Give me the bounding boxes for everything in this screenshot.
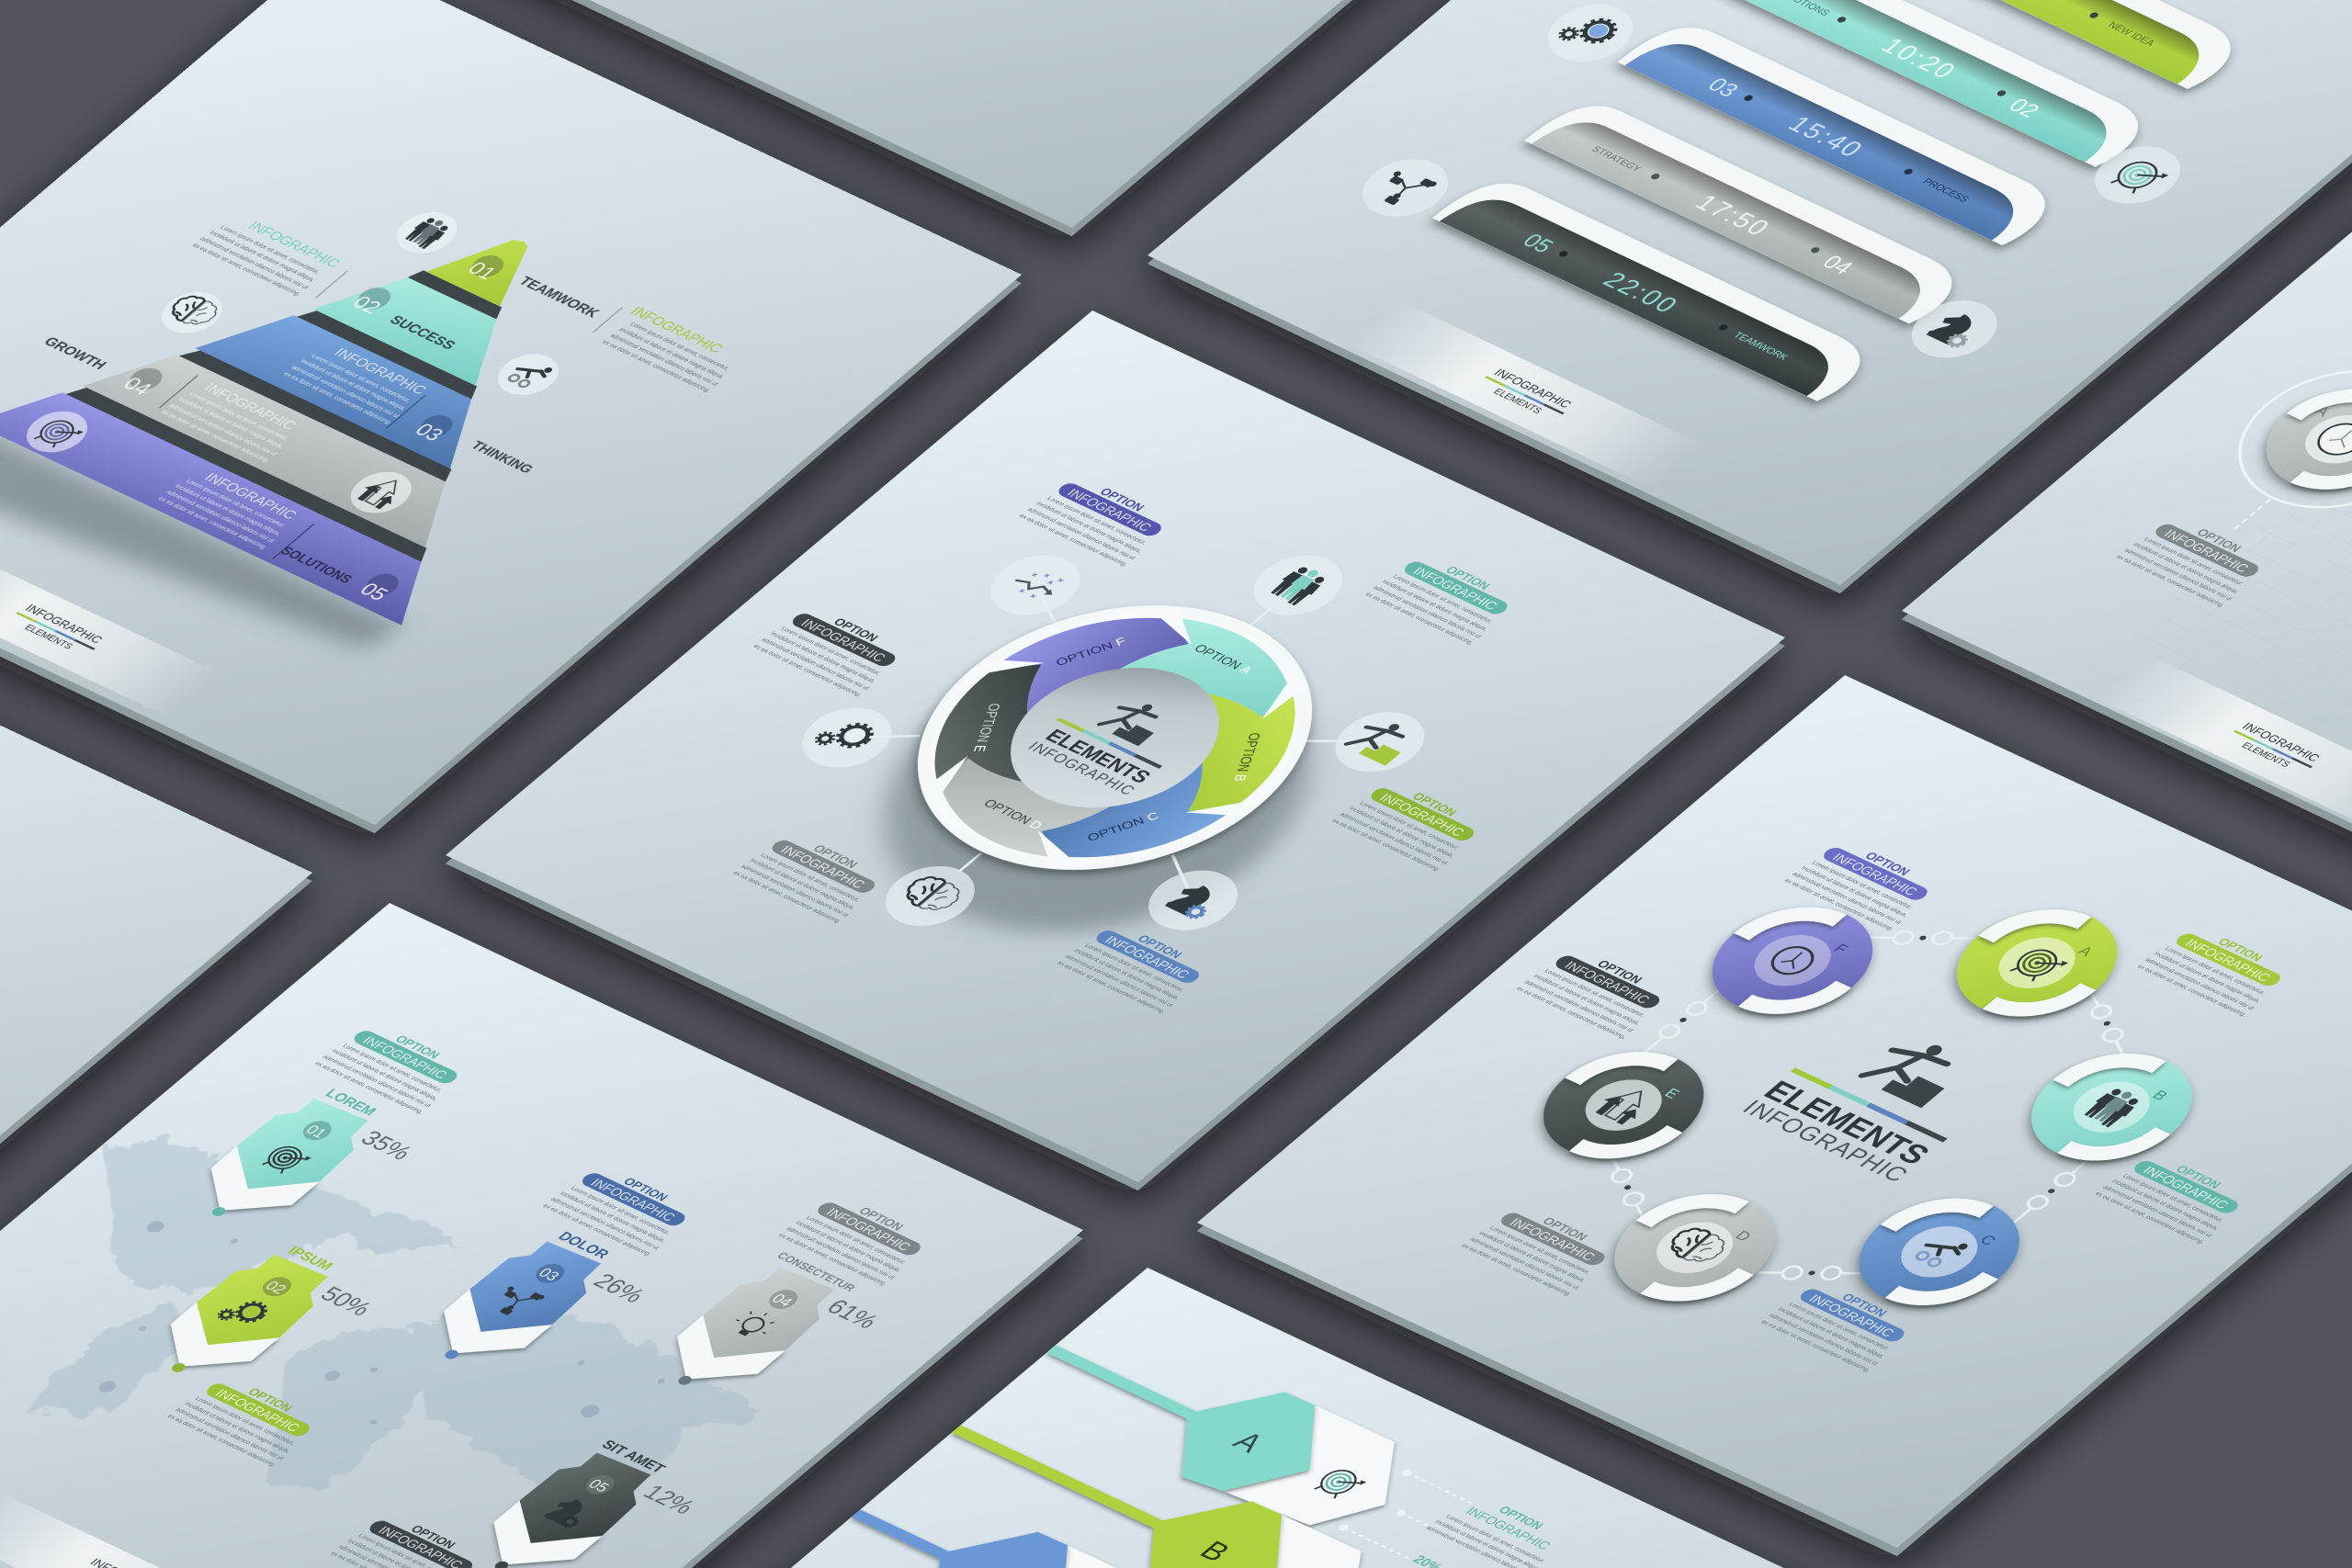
callout: option A: OPTION <box>1442 564 1493 592</box>
pyramid chart: incididunt ut labore et dolore magna aliqua, <box>174 483 282 536</box>
disc B: B <box>2149 1088 2172 1103</box>
callout: option D: OPTION <box>810 842 861 871</box>
callout: option F: Lorem ipsum dolor sit amet, consectetur, <box>1810 861 1914 910</box>
text block: green infographic: INFOGRAPHIC <box>627 305 726 356</box>
timeline bar: dark: 05 <box>1517 231 1558 257</box>
callout: green: incididunt ut labore et dolore magna aliqua, <box>183 1401 291 1454</box>
pyramid chart: ex ea dolor sit amet, consectetur adipisicing. <box>156 496 268 550</box>
centre title: ELEMENTS <box>1756 1076 1937 1170</box>
wheel centre title <box>1022 682 1205 798</box>
pyramid chart: incididunt ut labore et dolore magna aliqua, <box>176 397 285 450</box>
callout: option B: incididunt ut labore et dolore magna aliqua, <box>2110 1179 2220 1232</box>
callout: option C: Lorem ipsum dolor sit amet, consectetur, <box>1083 942 1185 993</box>
text block: option infographic <box>1393 1488 1579 1568</box>
callout: blue: adminstrud xercitation ullamco laboris nisi ut <box>549 1197 661 1251</box>
callout: option C <box>1759 1276 1924 1373</box>
callout: option D: INFOGRAPHIC <box>1506 1216 1598 1264</box>
tag 03: 26% <box>587 1269 651 1307</box>
callout: option D: OPTION <box>1540 1215 1590 1243</box>
callout: option B: INFOGRAPHIC <box>1375 792 1467 840</box>
callout: option E: OPTION <box>831 615 881 644</box>
callout: option A <box>2135 920 2300 1018</box>
callout: option E: ex ea dolor sit amet, consectetur adipisicing. <box>1515 986 1627 1040</box>
text block: teal infographic: ex ea dolor sit amet, consectetur adipisicing. <box>190 243 302 298</box>
pyramid chart: adminstrud xercitation ullamco laboris nisi ut <box>164 490 276 544</box>
footer chip: ELEMENTS <box>22 623 75 651</box>
callout: green <box>165 1370 329 1468</box>
timeline bar: teal: 02 <box>2003 95 2044 122</box>
pyramid chart: Lorem ipsum dolor sit amet, consectetur, <box>187 391 289 442</box>
tag 01: 01 <box>302 1122 331 1141</box>
timeline bar: blue: 03 <box>1702 74 1744 101</box>
tag 02 <box>136 1235 392 1408</box>
callout: option F: ex ea dolor sit amet, consectetur adipisicing. <box>1018 513 1129 568</box>
text block: green infographic: ex ea dolor sit amet, consectetur adipisicing. <box>600 340 712 394</box>
callout: option B <box>1330 774 1493 873</box>
panel: cycle wheel sheet <box>439 310 1792 1190</box>
pyramid chart: Lorem ipsum dolor sit amet, consectetur, <box>310 354 412 404</box>
callout: option F: OPTION <box>1862 850 1913 878</box>
tag 03 <box>409 1222 666 1395</box>
callout: option D: incididunt ut labore et dolore magna aliqua, <box>1477 1231 1587 1283</box>
hexagon B: B <box>1192 1536 1237 1567</box>
icon: network <box>1345 149 1465 227</box>
tag 05: SIT AMET <box>598 1438 669 1476</box>
timeline bar: grey <box>1524 93 1971 326</box>
callout: option E <box>752 600 915 698</box>
disc F <box>1679 887 1905 1033</box>
tag 03: DOLOR <box>554 1230 613 1262</box>
text block: teal infographic: Lorem ipsum dolor sit amet, consectetur, <box>219 225 321 276</box>
callout: teal: OPTION <box>392 1032 443 1061</box>
callout: option grey: incididunt ut labore et dolore magna aliqua, <box>2132 542 2240 595</box>
callout: option A: adminstrud xercitation ullamco laboris nisi ut <box>2143 957 2256 1011</box>
callout: grey: INFOGRAPHIC <box>822 1206 913 1254</box>
callout: option B: ex ea dolor sit amet, consectetur adipisicing. <box>1330 818 1442 873</box>
wheel blade B <box>1160 687 1307 812</box>
callout: option grey: ex ea dolor sit amet, consectetur adipisicing. <box>2115 554 2226 609</box>
text block: green infographic: Lorem ipsum dolor sit amet, consectetur, <box>628 321 730 372</box>
pyramid chart: SUCCESS <box>386 313 458 353</box>
panel: blank left sheet <box>0 546 319 1426</box>
callout: option E: incididunt ut labore et dolore magna aliqua, <box>1532 974 1641 1026</box>
disc A <box>1924 889 2150 1036</box>
callout: option C: OPTION <box>1135 932 1185 961</box>
callout: blue: incididunt ut labore et dolore magna aliqua, <box>559 1190 667 1244</box>
disc E: E <box>1661 1086 1683 1101</box>
timeline bar: blue <box>1618 15 2064 248</box>
footer chip: INFOGRAPHIC <box>1491 367 1575 411</box>
label: teamwork: TEAMWORK <box>515 275 603 321</box>
world map <box>0 1101 785 1568</box>
callout: teal <box>313 1017 477 1115</box>
wheel: OPTION E <box>970 704 1004 752</box>
callout: option D <box>731 827 894 925</box>
callout: option E: ex ea dolor sit amet, consectetur adipisicing. <box>752 644 863 698</box>
callout: green: ex ea dolor sit amet, consectetur adipisicing. <box>165 1414 277 1468</box>
callout: option C: incididunt ut labore et dolore magna aliqua, <box>1072 948 1181 1001</box>
callout: grey: incididunt ut labore et dolore magna aliqua, <box>794 1220 902 1273</box>
callout: option A <box>1363 548 1527 646</box>
footer chip <box>0 543 221 717</box>
pyramid chart: 05 <box>355 579 394 604</box>
pyramid chart: SOLUTIONS <box>277 545 356 586</box>
tag 04: 04 <box>768 1291 797 1310</box>
timeline bar: dark: TEAMWORK <box>1731 331 1791 363</box>
callout: option B: Lorem ipsum dolor sit amet, consectetur, <box>2121 1173 2224 1224</box>
callout: option C: adminstrud xercitation ullamco laboris nisi ut <box>1063 953 1174 1009</box>
text block: teal infographic <box>190 209 354 303</box>
text block: green infographic: adminstrud xercitation ullamco laboris nisi ut <box>608 333 719 388</box>
timeline bar: dark: 22:00 <box>1597 267 1684 317</box>
timeline bars <box>1432 0 2250 403</box>
pyramid chart: INFOGRAPHIC <box>201 470 300 523</box>
callout: option C: ex ea dolor sit amet, consectetur adipisicing. <box>1056 961 1167 1015</box>
pyramid chart <box>0 139 735 626</box>
wheel blade F <box>989 597 1197 720</box>
pyramid chart: 01 <box>463 258 502 284</box>
callout: option F: ex ea dolor sit amet, consectetur adipisicing. <box>1782 878 1895 932</box>
timeline bar: green <box>1804 0 2250 92</box>
disc B <box>1998 1033 2225 1180</box>
callout: dark: OPTION <box>408 1523 458 1551</box>
tag 05: 05 <box>584 1476 613 1495</box>
callout: option C: Lorem ipsum dolor sit amet, consectetur, <box>1787 1302 1891 1351</box>
callout: option F: adminstrud xercitation ullamco laboris nisi ut <box>1025 507 1136 561</box>
callout: option F: Lorem ipsum dolor sit amet, consectetur, <box>1046 496 1148 546</box>
icon: knight <box>1894 289 2015 368</box>
callout: grey: ex ea dolor sit amet, consectetur adipisicing. <box>776 1233 888 1287</box>
tag 04: 61% <box>820 1295 885 1333</box>
disc F: F <box>1830 942 1852 956</box>
centre title: INFOGRAPHIC <box>1736 1096 1914 1187</box>
pyramid chart: adminstrud xercitation ullamco laboris nisi ut <box>167 403 278 457</box>
pyramid chart: 02 <box>347 291 387 317</box>
tag 05: 12% <box>638 1480 701 1518</box>
footer chip: ELEMENTS <box>1491 387 1544 416</box>
wheel centre title: INFOGRAPHIC <box>1024 739 1139 798</box>
callout: option F <box>1018 469 1181 568</box>
tag 05 <box>458 1433 716 1568</box>
callout: option F: incididunt ut labore et dolore magna aliqua, <box>1800 865 1909 919</box>
disc C <box>1826 1179 2052 1325</box>
icon: runner bubble <box>1317 701 1442 783</box>
callout: option F: OPTION <box>1097 485 1148 513</box>
callout: blue: OPTION <box>620 1175 671 1203</box>
callout: option E: OPTION <box>1594 958 1645 986</box>
callout: option grey: INFOGRAPHIC <box>2160 528 2251 575</box>
wheel: OPTION C <box>1085 809 1160 843</box>
timeline bar: teal <box>1711 0 2157 169</box>
callout: option A: ex ea dolor sit amet, consectetur adipisicing. <box>2135 964 2248 1018</box>
footer chip: INFOGRAPHIC <box>2239 720 2323 764</box>
callout: option F: INFOGRAPHIC <box>1063 487 1154 535</box>
pyramid chart: incididunt ut labore et dolore magna aliqua, <box>299 359 407 412</box>
icon: chart bubble <box>972 545 1098 626</box>
callout: option F: incididunt ut labore et dolore magna aliqua, <box>1035 501 1143 554</box>
callout: option A: INFOGRAPHIC <box>1409 565 1500 613</box>
wheel <box>820 549 1409 926</box>
centre title <box>1736 1010 2016 1187</box>
callout: green: OPTION <box>245 1386 296 1414</box>
tag 01 <box>176 1078 433 1252</box>
callout: option E: Lorem ipsum dolor sit amet, consectetur, <box>779 626 882 676</box>
callout: option E: INFOGRAPHIC <box>797 617 888 665</box>
wheel: OPTION F <box>1054 635 1128 668</box>
callout: option grey: Lorem ipsum dolor sit amet, consectetur, <box>2143 536 2245 587</box>
panel: right sheet <box>1895 66 2352 946</box>
wheel: OPTION B <box>1231 733 1264 782</box>
callout: option D: adminstrud xercitation ullamco laboris nisi ut <box>1468 1236 1580 1291</box>
text block: option infographic: OPTION <box>1496 1504 1546 1532</box>
callout: option A: OPTION <box>2215 936 2266 964</box>
callout: green: adminstrud xercitation ullamco laboris nisi ut <box>174 1407 285 1461</box>
callout: blue <box>541 1159 705 1258</box>
callout: option B: Lorem ipsum dolor sit amet, consectetur, <box>1358 801 1461 851</box>
tag 02: 02 <box>262 1279 290 1297</box>
panel: pyramid sheet <box>0 0 1028 833</box>
text block: teal infographic: incididunt ut labore et dolore magna aliqua, <box>208 231 316 283</box>
callout: option C <box>1056 917 1218 1015</box>
callout: option E: incididunt ut labore et dolore magna aliqua, <box>768 631 877 684</box>
callout: option E: adminstrud xercitation ullamco laboris nisi ut <box>1522 979 1634 1033</box>
callout: option D: INFOGRAPHIC <box>776 844 868 891</box>
pyramid chart: 03 <box>410 419 449 445</box>
timeline bar: green: NEW IDEA <box>2105 20 2157 49</box>
timeline bar: grey: STRATEGY <box>1589 144 1645 175</box>
callout: option B: adminstrud xercitation ullamco laboris nisi ut <box>2101 1185 2213 1238</box>
callout: green: INFOGRAPHIC <box>211 1387 302 1435</box>
icon: gears bubble <box>784 696 910 779</box>
callout: grey: adminstrud xercitation ullamco laboris nisi ut <box>785 1226 896 1280</box>
callout: option F: adminstrud xercitation ullamco laboris nisi ut <box>1791 872 1903 926</box>
callout: option D: ex ea dolor sit amet, consectetur adipisicing. <box>1460 1243 1573 1297</box>
panel: circles sheet <box>1191 675 2352 1556</box>
footer chip <box>1348 300 1704 489</box>
hexagon A <box>1001 1304 1436 1548</box>
timeline bar: dark <box>1432 170 1880 403</box>
timeline bar: grey: 17:50 <box>1689 190 1775 240</box>
callout: grey <box>776 1189 940 1287</box>
timeline bar: teal: 10:20 <box>1875 33 1962 83</box>
pyramid chart: ex ea dolor sit amet, consectetur adipisicing. <box>160 410 271 464</box>
pyramid chart: adminstrud xercitation ullamco laboris nisi ut <box>289 365 401 419</box>
disc C: C <box>1976 1232 1999 1248</box>
callout: option grey: adminstrud xercitation ullamco laboris nisi ut <box>2122 547 2233 602</box>
wheel blade C <box>1033 755 1240 878</box>
footer chip <box>0 1490 300 1568</box>
callout: option A: Lorem ipsum dolor sit amet, consectetur, <box>2164 946 2267 996</box>
callout: teal: Lorem ipsum dolor sit amet, consectetur, <box>341 1043 444 1093</box>
callout: green: Lorem ipsum dolor sit amet, consectetur, <box>194 1396 296 1447</box>
callout: option A: adminstrud xercitation ullamco laboris nisi ut <box>1372 585 1483 639</box>
pyramid chart: 04 <box>119 373 157 399</box>
callout: option E: adminstrud xercitation ullamco laboris nisi ut <box>760 637 871 692</box>
icon: people bubble <box>1235 544 1361 626</box>
panel: timeline sheet <box>1141 0 2352 593</box>
wheel: OPTION A <box>1191 641 1256 677</box>
pyramid chart: Lorem ipsum dolor sit amet, consectetur, <box>185 479 287 529</box>
callout: teal: INFOGRAPHIC <box>358 1034 450 1082</box>
icon: people <box>384 205 469 261</box>
callout: option B: INFOGRAPHIC <box>2139 1165 2231 1212</box>
callout: option B <box>2093 1147 2257 1246</box>
callout: option D: incididunt ut labore et dolore magna aliqua, <box>748 858 856 911</box>
panel: blank top-centre sheet <box>373 0 1725 236</box>
callout: blue: ex ea dolor sit amet, consectetur adipisicing. <box>541 1203 652 1258</box>
text block: green infographic <box>587 300 750 394</box>
callout: teal: adminstrud xercitation ullamco laboris nisi ut <box>321 1055 433 1109</box>
footer chip: ELEMENTS <box>2239 740 2292 770</box>
callout: teal: incididunt ut labore et dolore magna aliqua, <box>330 1048 439 1101</box>
callout: option A: INFOGRAPHIC <box>2181 937 2273 985</box>
hexagon A: A <box>1226 1427 1271 1459</box>
timeline bar: grey: 04 <box>1816 252 1858 278</box>
disc D: D <box>1732 1228 1755 1244</box>
label: thinking: THINKING <box>467 439 537 477</box>
tag 02: IPSUM <box>284 1244 336 1273</box>
panel: world map sheet <box>0 903 1090 1568</box>
icon: gears <box>1530 0 1651 73</box>
text block: green infographic: incididunt ut labore et dolore magna aliqua, <box>617 327 726 380</box>
footer chip <box>2096 654 2352 842</box>
dashed leader lines <box>1336 1468 1441 1544</box>
callout: option B: OPTION <box>1409 790 1460 818</box>
timeline bar: blue: 15:40 <box>1782 112 1869 162</box>
callout: option B: ex ea dolor sit amet, consectetur adipisicing. <box>2093 1191 2206 1246</box>
pyramid chart: ex ea dolor sit amet, consectetur adipisicing. <box>282 371 393 426</box>
disc A: A <box>2075 943 2098 960</box>
tag 01: 35% <box>355 1126 418 1164</box>
wheel centre title: ELEMENTS <box>1040 725 1157 787</box>
wheel: OPTION D <box>980 796 1046 831</box>
callout: option C: adminstrud xercitation ullamco laboris nisi ut <box>1768 1313 1880 1367</box>
label: growth: GROWTH <box>40 335 109 372</box>
text block: teal infographic: INFOGRAPHIC <box>244 220 344 271</box>
callout: option C: incididunt ut labore et dolore magna aliqua, <box>1776 1307 1886 1359</box>
text block: option infographic: Lorem ipsum dolor sit amet, consectetur, <box>1444 1514 1546 1564</box>
callout: option A: incididunt ut labore et dolore magna aliqua, <box>2153 952 2262 1004</box>
icon: target <box>2077 136 2198 214</box>
tag 04 <box>642 1249 898 1421</box>
pyramid chart: INFOGRAPHIC <box>200 381 300 433</box>
callout: option C: ex ea dolor sit amet, consectetur adipisicing. <box>1759 1319 1871 1373</box>
callout: option grey <box>2115 511 2278 609</box>
icon: brain <box>149 285 235 341</box>
hexagon B <box>906 1384 1403 1568</box>
wheel blade E <box>922 663 1069 788</box>
callout: option C: OPTION <box>1838 1292 1890 1319</box>
callout: dark <box>329 1507 492 1568</box>
panel: hexagon sheet <box>494 1268 1847 1568</box>
disc D <box>1581 1174 1808 1321</box>
icon: brain bubble <box>867 855 993 937</box>
callout: option C: INFOGRAPHIC <box>1101 934 1192 981</box>
callout: option E <box>1515 942 1679 1040</box>
hexagon C <box>806 1469 1189 1568</box>
callout: option A: Lorem ipsum dolor sit amet, consectetur, <box>1391 574 1494 625</box>
text block: option infographic: INFOGRAPHIC <box>1462 1506 1553 1552</box>
callout: option E: Lorem ipsum dolor sit amet, consectetur, <box>1543 968 1646 1019</box>
callout: option A: ex ea dolor sit amet, consectetur adipisicing. <box>1363 592 1475 646</box>
tag 04: CONSECTETUR <box>774 1250 858 1293</box>
callout: option D <box>1460 1200 1624 1297</box>
callout: option B: OPTION <box>2173 1163 2224 1190</box>
tag 03: 03 <box>535 1265 563 1284</box>
connector links <box>1504 872 2231 1339</box>
callout: option D: Lorem ipsum dolor sit amet, consectetur, <box>759 852 861 903</box>
callout: option E: INFOGRAPHIC <box>1560 960 1652 1007</box>
callout: option D: ex ea dolor sit amet, consectetur adipisicing. <box>731 870 842 925</box>
footer chip: INFOGRAPHIC <box>22 603 106 646</box>
callout: option F: INFOGRAPHIC <box>1828 852 1920 898</box>
clock disc <box>2198 346 2352 533</box>
pyramid chart: INFOGRAPHIC <box>330 346 429 398</box>
callout: blue: INFOGRAPHIC <box>587 1177 678 1224</box>
map dots <box>5 1168 667 1559</box>
tag 01: LOREM <box>322 1087 379 1119</box>
callout: option grey: OPTION <box>2194 526 2245 555</box>
timeline bar: blue: PROCESS <box>1920 177 1971 205</box>
callout: option A: incididunt ut labore et dolore magna aliqua, <box>1381 580 1489 632</box>
callout: option C: INFOGRAPHIC <box>1805 1292 1897 1340</box>
disc E <box>1510 1032 1736 1179</box>
icon: knight bubble <box>1130 860 1256 942</box>
callout: option B: adminstrud xercitation ullamco laboris nisi ut <box>1338 812 1449 866</box>
tag 02: 50% <box>314 1282 379 1320</box>
clock disc: A <box>2311 403 2335 420</box>
wheel blade D <box>913 741 1122 867</box>
icon: runner <box>485 346 571 402</box>
callout: option D: Lorem ipsum dolor sit amet, consectetur, <box>1487 1225 1591 1276</box>
callout: blue: Lorem ipsum dolor sit amet, consectetur, <box>569 1186 672 1235</box>
text block: teal infographic: adminstrud xercitation ullamco laboris nisi ut <box>198 236 310 290</box>
callout: grey: OPTION <box>855 1205 907 1233</box>
callout: option D: adminstrud xercitation ullamco laboris nisi ut <box>739 863 850 919</box>
wheel blade A <box>1108 608 1317 734</box>
callout: option F <box>1782 834 1947 932</box>
callout: grey: Lorem ipsum dolor sit amet, consectetur, <box>805 1215 907 1266</box>
callout: option B: incididunt ut labore et dolore magna aliqua, <box>1347 806 1455 859</box>
callout: teal: ex ea dolor sit amet, consectetur adipisicing. <box>313 1061 424 1115</box>
